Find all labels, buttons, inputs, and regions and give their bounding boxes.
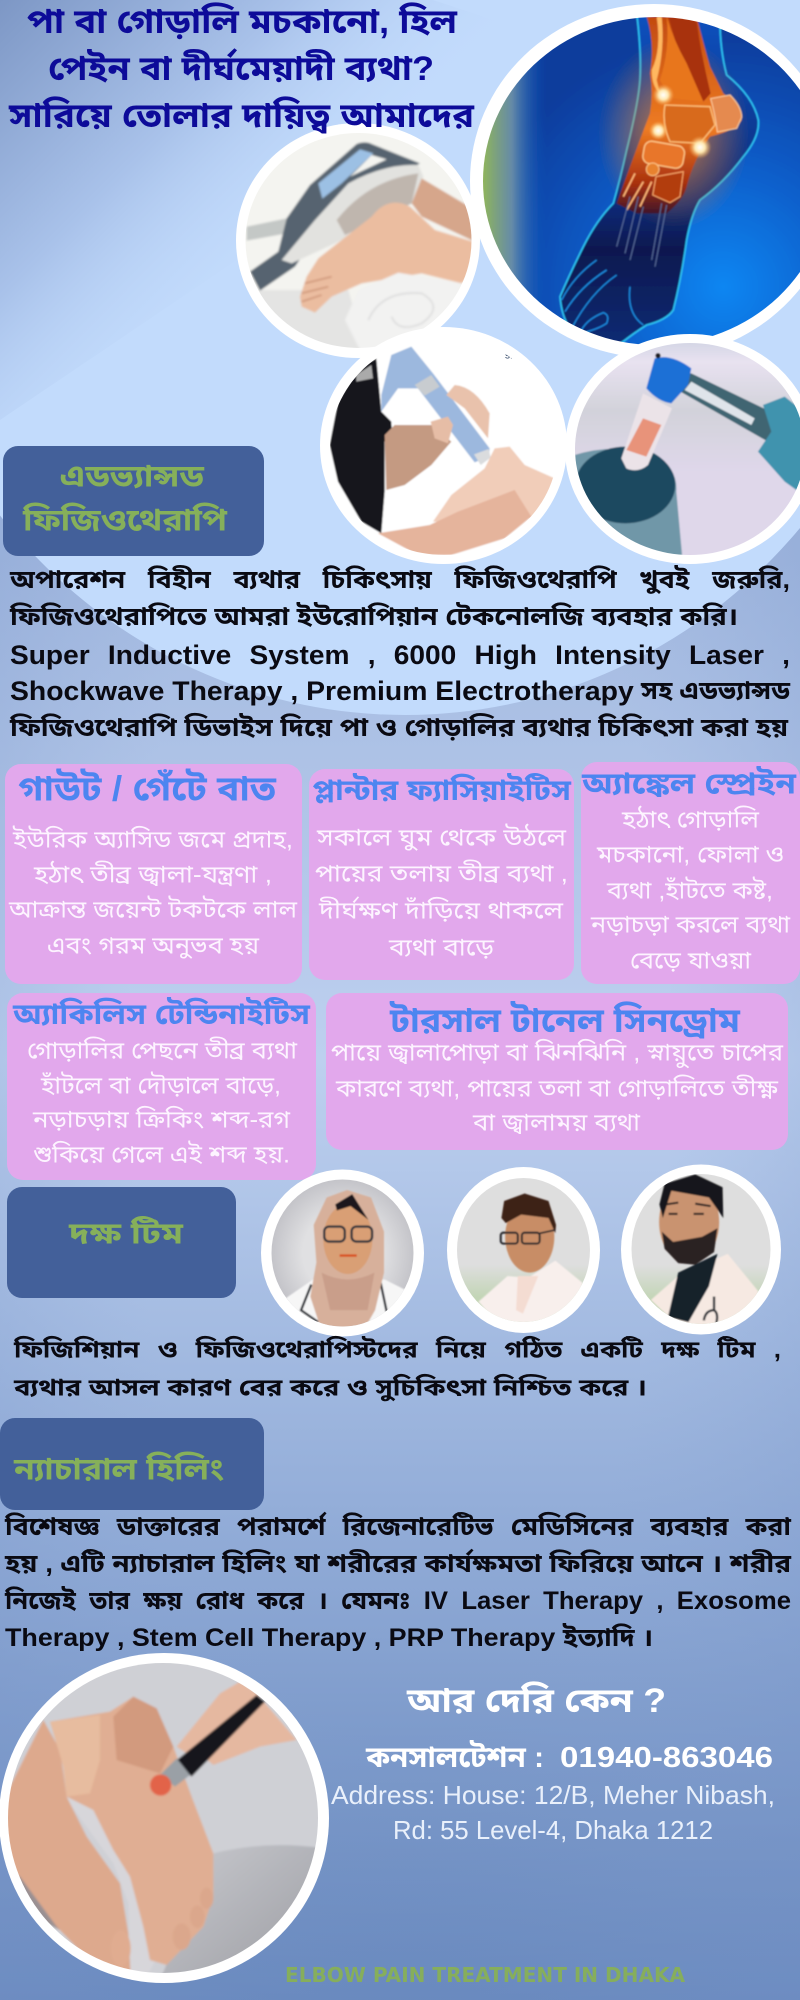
panel: ankle sprain: বেড়ে যাওয়া <box>630 948 752 974</box>
panel: gout <box>5 764 302 984</box>
photo: young male doctor <box>621 1164 781 1334</box>
panel: achilles tendinitis <box>7 993 316 1180</box>
title: পেইন বা দীর্ঘমেয়াদী ব্যথা? <box>48 48 434 88</box>
phone number <box>365 1741 773 1774</box>
section label: advanced physiotherapy: ফিজিওথেরাপি <box>22 502 228 538</box>
panel: plantar fasciitis: পায়ের তলায় তীব্র ব্যথা , <box>315 860 568 888</box>
section label: advanced physiotherapy <box>3 446 264 556</box>
panel: achilles tendinitis: শুকিয়ে গেলে এই শব্দ হয়. <box>33 1140 290 1168</box>
panel: achilles tendinitis: নড়াচড়ায় ক্রিকিং শব্দ-রগ <box>32 1106 291 1134</box>
text block: team description: ব্যথার আসল কারণ বের করে ও সুচিকিৎসা নিশ্চিত করে । <box>13 1374 647 1402</box>
text block: team description: ফিজিশিয়ান ও ফিজিওথেরাপিস্টদের নিয়ে গঠিত একটি দক্ষ টিম , <box>13 1336 781 1364</box>
panel: ankle sprain: ব্যথা ,হাঁটতে কষ্ট, <box>606 876 773 904</box>
text block: natural healing description: হয় , এটি ন্যাচারাল হিলিং যা শরীরের কার্যক্ষমতা ফিরিয়ে আনে । শরীর <box>4 1548 792 1578</box>
photo: PRP test tube <box>565 325 800 570</box>
heading: ankle sprain: অ্যাঙ্কেল স্প্রেইন <box>581 766 796 800</box>
panel: achilles tendinitis: হাঁটলে বা দৌড়ালে বাড়ে, <box>40 1072 281 1100</box>
panel: ankle sprain <box>581 762 800 984</box>
panel: plantar fasciitis: সকালে ঘুম থেকে উঠলে <box>316 824 566 852</box>
title: পা বা গোড়ালি মচকানো, হিল <box>27 1 458 41</box>
panel: plantar fasciitis <box>309 769 574 980</box>
panel: gout: ইউরিক অ্যাসিড জমে প্রদাহ, <box>12 826 293 854</box>
panel: tarsal tunnel syndrome: কারণে ব্যথা, পায়ের তলা বা গোড়ালিতে তীক্ষ্ণ <box>335 1074 778 1102</box>
text block: natural healing description: নিজেই তার ক্ষয় রোধ করে । যেমনঃ IV Laser Therapy , Exosome <box>4 1586 791 1615</box>
heading: gout: গাউট / গেঁটে বাত <box>18 768 276 808</box>
title <box>8 1 475 135</box>
photo: glowing ankle bones <box>470 0 800 360</box>
text block: physiotherapy description: ফিজিওথেরাপি ডিভাইস দিয়ে পা ও গোড়ালির ব্যথার চিকিৎসা করা হয় <box>9 713 789 742</box>
panel: ankle sprain: হঠাৎ গোড়ালি <box>621 806 759 834</box>
panel: gout: আক্রান্ত জয়েন্ট টকটকে লাল <box>8 896 297 924</box>
section label: natural healing <box>0 1418 264 1510</box>
photo: laser pen on heel <box>0 1653 333 1983</box>
panel: tarsal tunnel syndrome <box>326 993 788 1150</box>
text block: physiotherapy description <box>9 565 791 742</box>
address: Address: House: 12/B, Meher Nibash, <box>331 1780 775 1810</box>
text block: physiotherapy description: Shockwave Therapy , Premium Electrotherapy সহ এডভ্যান্সড <box>10 676 791 706</box>
text block: natural healing description <box>4 1511 792 1652</box>
title: সারিয়ে তোলার দায়িত্ব আমাদের <box>8 95 475 135</box>
panel: ankle sprain: নড়াচড়া করলে ব্যথা <box>590 912 791 938</box>
phone number: 01940-863046 <box>560 1742 773 1774</box>
text block: team description <box>13 1336 781 1402</box>
section label: natural healing: ন্যাচারাল হিলিং <box>13 1450 224 1486</box>
call to action heading: আর দেরি কেন ? <box>406 1680 666 1720</box>
footer caption: ELBOW PAIN TREATMENT IN DHAKA <box>285 1963 686 1987</box>
text block: physiotherapy description: অপারেশন বিহীন ব্যথার চিকিৎসায় ফিজিওথেরাপি খুবই জরুরি, <box>9 565 790 595</box>
panel: plantar fasciitis: দীর্ঘক্ষণ দাঁড়িয়ে থাকলে <box>318 896 564 924</box>
section label: skilled team: দক্ষ টিম <box>68 1216 183 1250</box>
panel: plantar fasciitis: ব্যথা বাড়ে <box>388 934 495 962</box>
panel: gout: হঠাৎ তীব্র জ্বালা-যন্ত্রণা , <box>33 860 272 888</box>
heading: achilles tendinitis: অ্যাকিলিস টেন্ডিনাইটিস <box>12 998 310 1031</box>
panel: achilles tendinitis: গোড়ালির পেছনে তীব্র ব্যথা <box>27 1036 298 1064</box>
text block: natural healing description: বিশেষজ্ঞ ডাক্তারের পরামর্শে রিজেনারেটিভ মেডিসিনের ব্যবহার করা <box>4 1511 792 1541</box>
phone number: কনসালটেশন : <box>365 1741 544 1774</box>
panel: ankle sprain: মচকানো, ফোলা ও <box>596 842 784 868</box>
text block: physiotherapy description: ফিজিওথেরাপিতে আমরা ইউরোপিয়ান টেকনোলজি ব্যবহার করি। <box>9 602 738 631</box>
text block: natural healing description: Therapy , Stem Cell Therapy , PRP Therapy ইত্যাদি । <box>5 1623 653 1652</box>
heading: tarsal tunnel syndrome: টারসাল টানেল সিনড্রোম <box>389 1000 741 1040</box>
photo: woman doctor <box>261 1170 424 1337</box>
panel: tarsal tunnel syndrome: পায়ে জ্বালাপোড়া বা ঝিনঝিনি , স্নায়ুতে চাপের <box>331 1038 784 1068</box>
photo: shockwave wand <box>318 325 571 570</box>
heading: plantar fasciitis: প্লান্টার ফ্যাসিয়াইটিস <box>312 774 571 807</box>
photo: device on heel <box>236 123 480 358</box>
panel: gout: এবং গরম অনুভব হয় <box>47 932 260 960</box>
address <box>331 1780 775 1845</box>
text block: physiotherapy description: Super Inductive System , 6000 High Intensity Laser , <box>10 640 790 670</box>
section label: skilled team <box>7 1187 236 1298</box>
panel: tarsal tunnel syndrome: বা জ্বালাময় ব্যথা <box>472 1110 641 1136</box>
section label: advanced physiotherapy: এডভ্যান্সড <box>60 458 205 494</box>
address: Rd: 55 Level-4, Dhaka 1212 <box>393 1815 713 1845</box>
photo: senior male doctor <box>447 1167 600 1333</box>
small mark in photo: s. <box>505 350 513 362</box>
